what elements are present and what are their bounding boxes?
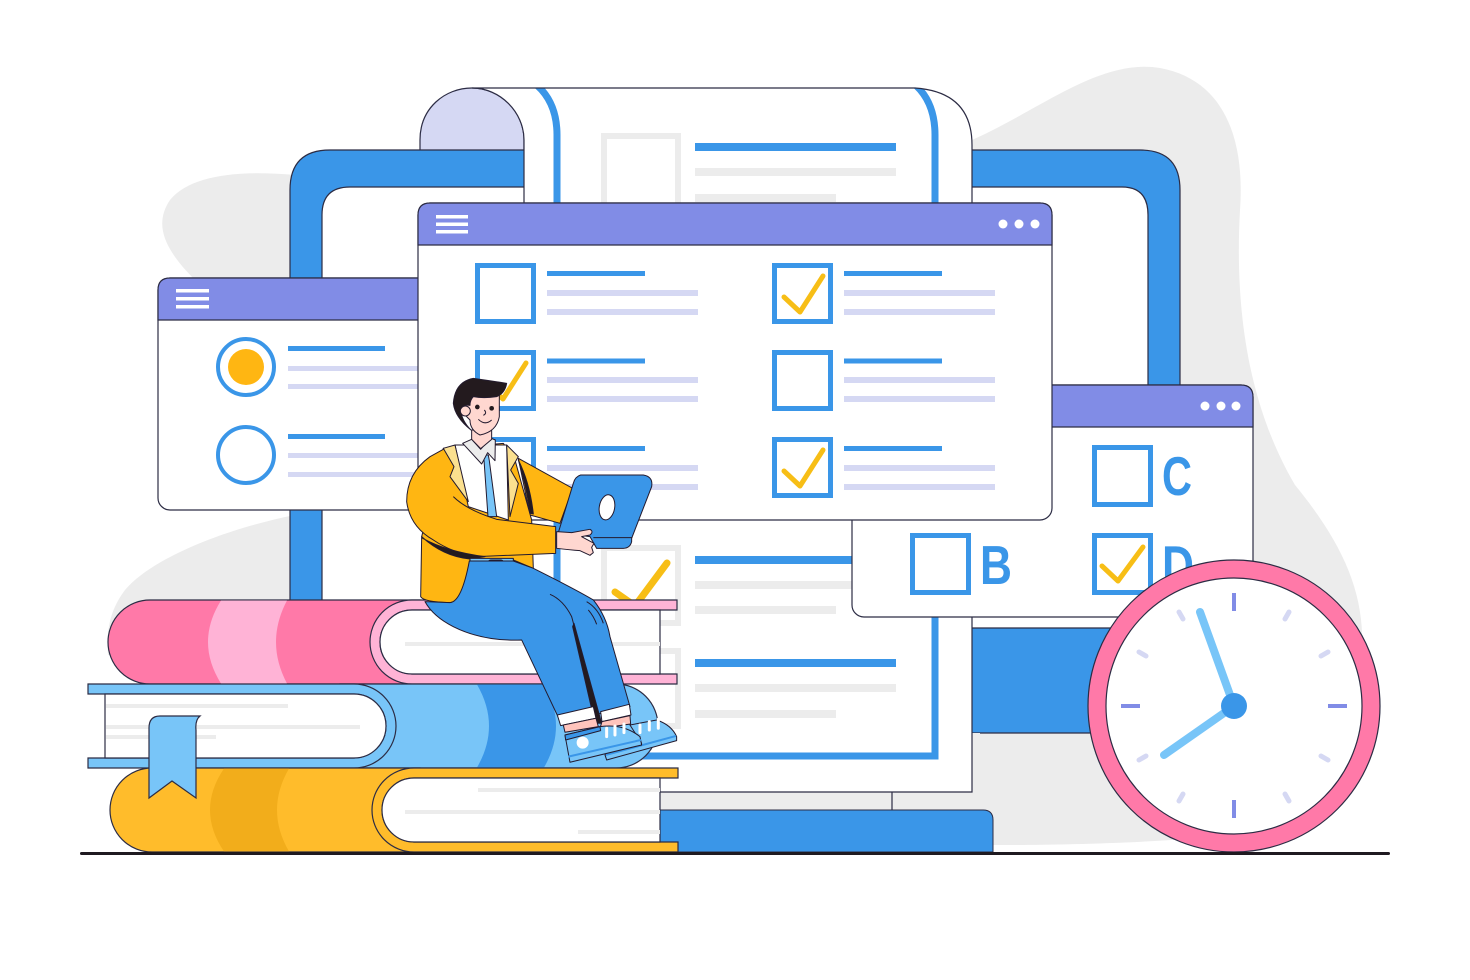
trouser cuffs (557, 704, 631, 726)
check marks (486, 276, 823, 486)
neck (472, 430, 492, 449)
option D (1094, 534, 1194, 596)
illustration (80, 66, 1390, 855)
shirt (455, 445, 508, 520)
background blobs (108, 67, 1362, 845)
empty radio (218, 427, 428, 483)
answer window header (1040, 385, 1253, 427)
jacket shadow (518, 460, 533, 514)
head (462, 393, 499, 435)
hamburger icon (176, 289, 209, 308)
option C (1094, 445, 1192, 507)
clock (1088, 560, 1380, 852)
exam paper (472, 82, 972, 792)
clock rim (1088, 560, 1380, 852)
paper outline (472, 88, 972, 792)
person with laptop (407, 378, 677, 762)
selected radio (218, 339, 428, 395)
near shoe (565, 724, 642, 762)
socks (563, 716, 631, 732)
hamburger icon (436, 215, 468, 234)
option C: C (1162, 445, 1192, 507)
torso jacket (421, 443, 533, 603)
yellow book (110, 768, 678, 852)
far arm (518, 458, 573, 523)
collar (463, 438, 495, 464)
blue book (88, 684, 658, 768)
option D: D (1162, 534, 1194, 596)
hand (557, 529, 594, 555)
blue text lines (547, 271, 942, 451)
monitor base (660, 810, 993, 852)
bookmark (149, 716, 200, 798)
paper row 3 (604, 651, 896, 726)
checkbox boxes (478, 266, 830, 496)
trouser seam and creases (550, 594, 603, 723)
face features (475, 405, 494, 423)
clock face (1106, 578, 1362, 834)
pink book (108, 600, 677, 684)
lavender text lines (547, 290, 995, 490)
paper blue border (533, 82, 935, 756)
paper row 2 (604, 548, 896, 623)
clock hands (1164, 612, 1234, 755)
window dots (1200, 402, 1240, 410)
tie (483, 455, 497, 517)
minor ticks (1139, 612, 1328, 801)
window dots (998, 220, 1040, 228)
trousers (425, 561, 630, 717)
far shoe (605, 719, 677, 760)
paper row 1 (604, 136, 896, 216)
monitor (290, 150, 1180, 852)
major ticks (1121, 593, 1347, 818)
lapels (443, 445, 518, 517)
scroll curl (420, 88, 524, 155)
clock hub (1221, 693, 1247, 719)
ear (460, 406, 470, 416)
answer window (852, 385, 1253, 617)
near arm (407, 449, 556, 557)
main checklist window (418, 203, 1052, 520)
monitor stand (660, 733, 980, 810)
ground line (80, 852, 1390, 855)
radio window header (158, 278, 448, 320)
main window header (418, 203, 1052, 245)
radio window (158, 278, 448, 510)
belt (470, 558, 513, 566)
laptop (558, 475, 652, 548)
under-arm shadow (422, 537, 485, 559)
monitor screen (322, 187, 1148, 628)
book stack (88, 600, 678, 852)
option B: B (980, 534, 1012, 596)
hair (453, 378, 507, 430)
monitor frame (290, 150, 1180, 733)
option B (912, 534, 1012, 596)
